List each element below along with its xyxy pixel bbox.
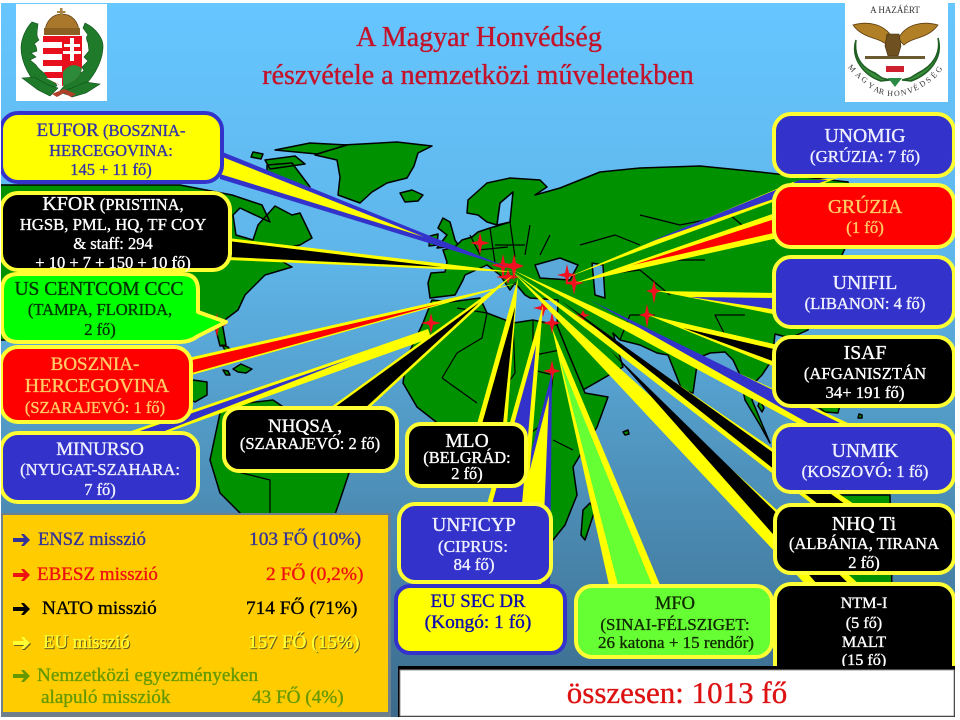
arc text [846,63,944,98]
callout: UNMIK: (KOSZOVÓ: 1 fő) [802,462,928,481]
South America [210,400,350,520]
callout: EU SEC DR [396,586,565,653]
North America [0,185,312,346]
spoke: NHQ Ti [513,272,854,504]
spoke: UNMIK [513,270,848,423]
total box [398,666,955,717]
location stars [207,232,662,382]
row: ENSZ: ENSZ misszió [38,529,146,550]
green hills [63,65,82,86]
arc text: S [924,75,933,85]
arc text: H [887,89,893,98]
callout: EUFOR: EUFOR (BOSZNIA- [37,120,185,141]
callout: MFO: (SINAI-FÉLSZIGET: [600,615,750,634]
title line 2: részvétele a nemzetközi műveletekben [262,60,694,91]
Madagascar [581,503,595,540]
arc text: É [928,70,939,80]
callout: EU SEC DR: EU SEC DR [431,591,526,612]
row: EBESZ: EBESZ misszió [37,564,158,585]
spoke: MINURSO [117,329,431,436]
callout: NTM-I and MALT: NTM-I [841,594,887,612]
row: ENSZ [13,528,361,550]
callout: ISAF: (AFGANISZTÁN [804,364,926,383]
row: EU: EU misszió [43,632,130,653]
Indonesian islands [623,400,862,448]
spoke: UNFICYP [487,305,543,504]
arc text: D [918,78,928,89]
callout: UNMIK [774,425,954,492]
callout: UNIFIL [774,257,954,327]
emblem: Hungarian coat of arms [16,4,107,101]
shield [886,66,904,87]
callout: Grúzia [774,185,954,247]
callout: EUFOR [1,113,222,182]
callout: UNFICYP [399,504,551,582]
arc text: V [906,85,915,96]
ribbon [52,89,76,97]
arc text: O [894,89,900,98]
row: ENSZ: 103 FŐ (10%) [249,528,361,550]
Central America [180,378,207,402]
Cuba and Caribbean [222,345,252,375]
crown [45,14,79,33]
motto: A HAZÁÉRT [870,5,920,15]
callout: NHQ Ti: 2 fő) [848,553,880,572]
Ireland [429,234,438,246]
emblem: Magyar Honvédség [845,0,948,102]
callout: MLO: 2 fő) [451,464,483,483]
callout: US CENTCOM [2,274,226,342]
callout: KFOR: + 10 + 7 + 150 + 10 fő) [35,253,191,272]
spoke: MLO [477,278,518,424]
callout: NHQSA: (SZARAJEVÓ: 2 fő) [240,434,380,453]
callout: NHQ Ti [775,505,954,573]
row: NATO [13,597,357,619]
arc text: R [878,87,886,97]
arc text: M [846,63,858,74]
row: EU [13,631,359,653]
callout: NHQSA: NHQSA , [268,416,342,437]
callout: MINURSO: (NYUGAT-SZAHARA: [20,460,180,479]
Britain [437,218,459,248]
crown band [44,28,80,35]
callout: UNOMIG [774,114,954,176]
wings [853,23,938,45]
callout: UNOMIG: (GRÚZIA: 7 fő) [810,147,920,166]
spoke: Grúzia [575,212,778,283]
callout: ISAF [774,337,954,406]
callout: MLO: (BELGRÁD: [423,448,511,467]
Africa [403,298,608,540]
callout: MINURSO: MINURSO [56,439,144,460]
callout: MINURSO: 7 fő) [84,480,116,499]
wreath [855,38,939,81]
arc text: G [934,65,944,75]
row: EU: 157 FŐ (15%) [248,631,359,653]
shield [43,36,82,86]
Iceland [400,190,423,202]
callout: NTM-I and MALT: (15 fő) [842,651,886,669]
spoke: UNOMIG [568,178,838,277]
callout: EUFOR: HERCEGOVINA: [49,141,173,160]
spoke: KFOR [228,238,513,272]
shield stripes [43,42,62,72]
callout: Bosnia-Herzegovina: HERCEGOVINA [25,375,170,397]
callout: NHQ Ti: (ALBÁNIA, TIRANA [789,534,939,553]
arc text: N [900,88,907,97]
callout: UNMIK: UNMIK [832,440,899,462]
callout: UNFICYP: UNFICYP [432,515,516,536]
row: EBESZ: 2 FŐ (0,2%) [266,563,363,585]
spoke: NTM-I [513,272,860,585]
callout: NHQ Ti: NHQ Ti [832,513,897,535]
callout: US CENTCOM: (TAMPA, FLORIDA, [28,300,172,319]
total box: összesen: 1013 fő [567,675,787,710]
callout: Grúzia: (1 fő) [846,218,884,237]
eagle body [885,34,901,56]
spoke: EU SEC DR [495,372,552,590]
callout: KFOR: KFOR (PRISTINA, [42,193,184,215]
callout: MINURSO [1,433,198,502]
callout: US CENTCOM: US CENTCOM CCC [14,279,184,300]
callout: UNFICYP: 84 fő) [453,555,495,574]
callout: KFOR: & staff: 294 [73,234,153,253]
callout: MFO [576,586,772,657]
Greenland [315,142,432,203]
row: EBESZ [13,563,363,585]
wreath [21,22,103,97]
row: international treaties [13,665,344,708]
callout: ISAF: 34+ 191 fő) [826,383,904,402]
callout: MFO: 26 katona + 15 rendőr) [598,633,754,652]
Arctic islands [251,143,347,193]
spoke: NHQSA [327,275,513,410]
row: international treaties: Nemzetközi egyezményeken [37,665,258,686]
spoke: EUFOR [220,151,507,267]
callout: EU SEC DR: (Kongó: 1 fő) [425,612,531,633]
spoke: Bosnia [188,283,518,376]
callout: UNFICYP: (CIPRUS: [438,537,508,556]
row: international treaties: 43 FŐ (4%) [252,686,344,708]
callout: US CENTCOM: 2 fő) [84,320,116,339]
callout: MFO: MFO [655,594,695,614]
callout: NHQSA [224,408,397,471]
callout: Bosnia-Herzegovina [1,347,191,422]
crown cross [57,8,66,15]
Black Sea [535,258,578,280]
arc text: A [854,70,864,81]
row: NATO: 714 FŐ (71%) [246,597,357,619]
spoke: MFO [552,328,660,585]
country borders [230,215,760,520]
Caspian Sea [592,263,605,298]
callout: Bosnia-Herzegovina: BOSZNIA- [51,354,139,375]
callout: NTM-I and MALT: MALT [842,633,886,651]
spoke: ISAF [648,315,778,368]
callout: UNIFIL: (LIBANON: 4 fő) [805,294,925,313]
Baltic Sea [497,192,513,225]
callout: Bosnia-Herzegovina: (SZARAJEVÓ: 1 fő) [25,398,165,417]
sword [865,56,925,59]
callout: ISAF: ISAF [844,342,886,364]
world map [0,142,892,592]
callout: KFOR: HGSB, PML, HQ, TF COY [20,215,206,234]
callout: MLO: MLO [445,431,489,452]
callout: KFOR [1,193,230,272]
spokes [117,151,860,590]
Eurasia [428,166,858,443]
panel: mission summary [1,513,391,717]
callout: UNIFIL: UNIFIL [833,272,897,294]
double cross [63,38,81,61]
callout: Grúzia: GRÚZIA [828,196,903,218]
callout: MLO [407,424,526,486]
callout: NTM-I and MALT: (5 fő) [846,614,882,632]
arc text: É [912,82,920,93]
row: NATO: NATO misszió [42,598,157,619]
row: international treaties: alapuló missziók [41,687,171,708]
arc text: Y [867,80,876,91]
callout: EUFOR: 145 + 11 fő) [70,160,152,179]
arc text: G [859,75,870,85]
Australia [835,495,892,592]
arc text: A [873,84,881,95]
title [262,22,694,91]
callout: NTM-I and MALT [775,584,954,684]
spoke: UNIFIL [657,291,778,315]
title line 1: A Magyar Honvédség [356,22,602,53]
callout: UNOMIG: UNOMIG [825,125,905,147]
